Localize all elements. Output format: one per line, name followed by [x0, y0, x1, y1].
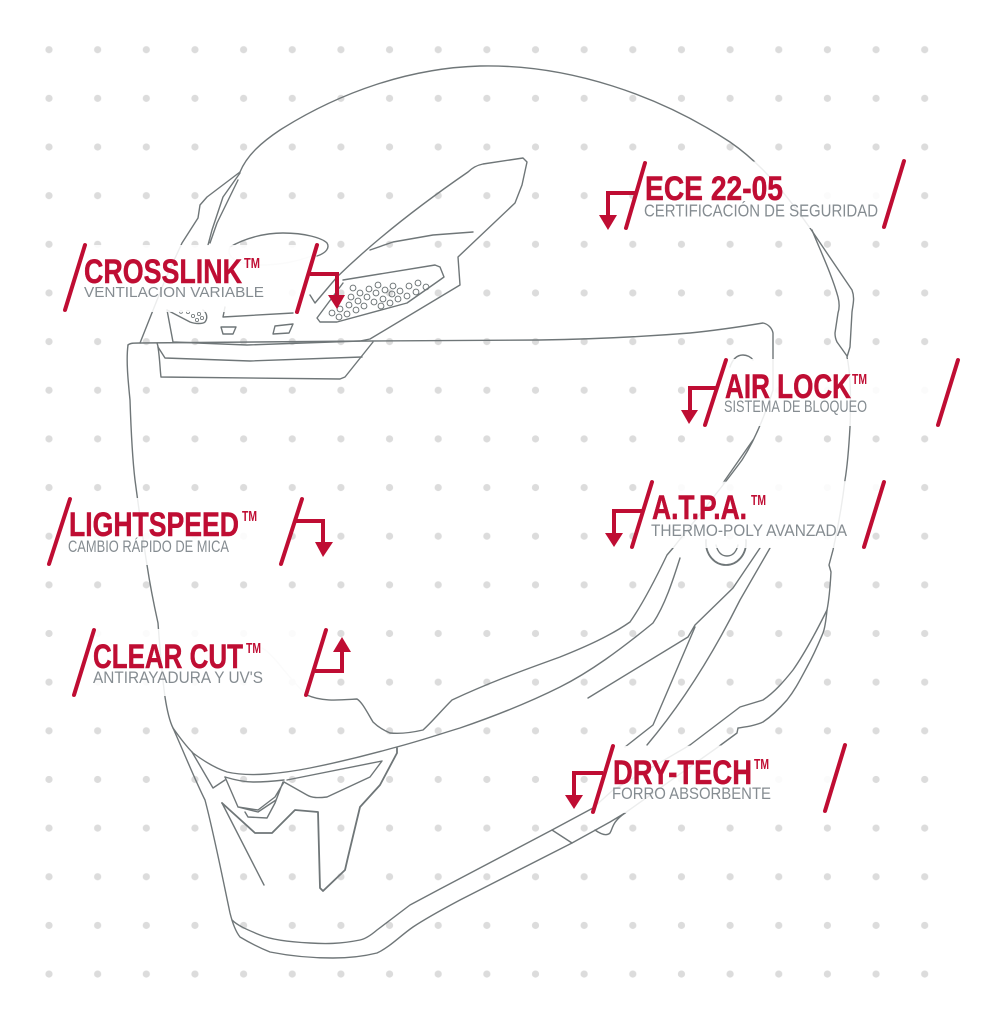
arrow down	[295, 521, 333, 557]
chin segment connector	[552, 830, 572, 843]
subtitle: SISTEMA DE BLOQUEO	[724, 398, 867, 416]
chin vent upper shard	[192, 752, 225, 788]
trademark: TM	[246, 640, 261, 657]
neck line lower	[625, 548, 770, 747]
chin guard main shape	[222, 748, 397, 891]
callout: Crosslink	[65, 245, 345, 312]
left slash	[705, 360, 726, 425]
left slash	[65, 245, 85, 310]
left slash	[74, 630, 94, 695]
callout: A.T.P.A.	[605, 482, 884, 547]
chin bar lower edge	[173, 728, 625, 958]
faint visor mechanism line	[262, 648, 307, 695]
left slash	[632, 482, 652, 547]
visor lower inner line	[723, 440, 753, 483]
front brow inner lines	[208, 173, 240, 245]
visor bracket inner line	[158, 347, 362, 361]
subtitle: CERTIFICACIÓN DE SEGURIDAD	[644, 200, 878, 220]
wing inner line	[370, 232, 473, 250]
right slash	[938, 360, 958, 425]
arrow down	[681, 388, 717, 424]
heading: ECE 22-05	[645, 170, 783, 208]
subtitle: ANTIRAYADURA Y UV'S	[93, 669, 263, 687]
trademark: TM	[852, 371, 867, 388]
heading: CROSSLINK	[84, 253, 242, 291]
left slash	[49, 499, 70, 564]
arrow down	[605, 511, 642, 547]
rear lower trim	[232, 610, 827, 944]
rear spoiler inner line	[812, 230, 847, 356]
ATPA ring	[706, 540, 746, 565]
front brow left edge	[140, 172, 240, 343]
helmet line drawing	[127, 66, 854, 958]
heading: A.T.P.A.	[652, 489, 747, 527]
subtitle: THERMO-POLY AVANZADA	[651, 521, 848, 540]
visor bracket	[157, 342, 373, 379]
left slash	[593, 746, 613, 812]
vent perforations	[329, 280, 429, 320]
trademark: TM	[242, 508, 257, 525]
heading: AIR LOCK	[725, 368, 851, 406]
strap hook	[595, 813, 625, 835]
callout: Lightspeed	[49, 499, 333, 564]
right slash	[864, 482, 884, 547]
arrow down to vent	[310, 274, 345, 309]
trademark: TM	[751, 492, 766, 509]
air lock pivot	[730, 355, 753, 367]
shell outline	[240, 66, 854, 813]
brow lower edge and wing	[167, 158, 527, 345]
faint intake lower line	[229, 247, 315, 265]
vent outline	[317, 265, 444, 322]
left mesh vent holes	[180, 310, 204, 322]
trademark: TM	[244, 255, 260, 272]
heading: CLEAR CUT	[93, 638, 243, 676]
divider slash	[281, 499, 302, 564]
arrow up	[315, 637, 351, 671]
heading: DRY-TECH	[613, 754, 752, 792]
left slash	[626, 163, 645, 228]
neck line upper	[588, 548, 760, 698]
callout: Air Lock	[681, 360, 958, 425]
text halos	[49, 161, 958, 813]
divider slash	[297, 245, 317, 312]
visor top edge	[128, 323, 773, 733]
trademark: TM	[754, 756, 769, 773]
subtitle: FORRO ABSORBENTE	[612, 784, 771, 803]
heading: LIGHTSPEED	[69, 506, 239, 544]
top intake ellipse	[230, 233, 328, 256]
arrow down	[565, 773, 603, 809]
visor outline	[127, 345, 680, 775]
callout: Dry-Tech	[565, 745, 845, 812]
chin vent top edge	[225, 761, 382, 798]
chin vent inner frame	[225, 777, 284, 818]
slot opening	[223, 307, 293, 317]
small front vents	[221, 324, 293, 334]
divider slash	[306, 630, 326, 695]
subtitle: CAMBIO RÁPIDO DE MICA	[68, 537, 229, 556]
callout: ECE 22-05	[599, 161, 904, 230]
right slash	[884, 161, 904, 227]
arrow down	[599, 193, 635, 230]
left mesh vent	[167, 310, 207, 324]
callout: Clear Cut	[74, 630, 351, 695]
subtitle: VENTILACION VARIABLE	[84, 284, 264, 301]
chin guard diagonal	[222, 803, 264, 885]
right slash	[825, 745, 845, 811]
